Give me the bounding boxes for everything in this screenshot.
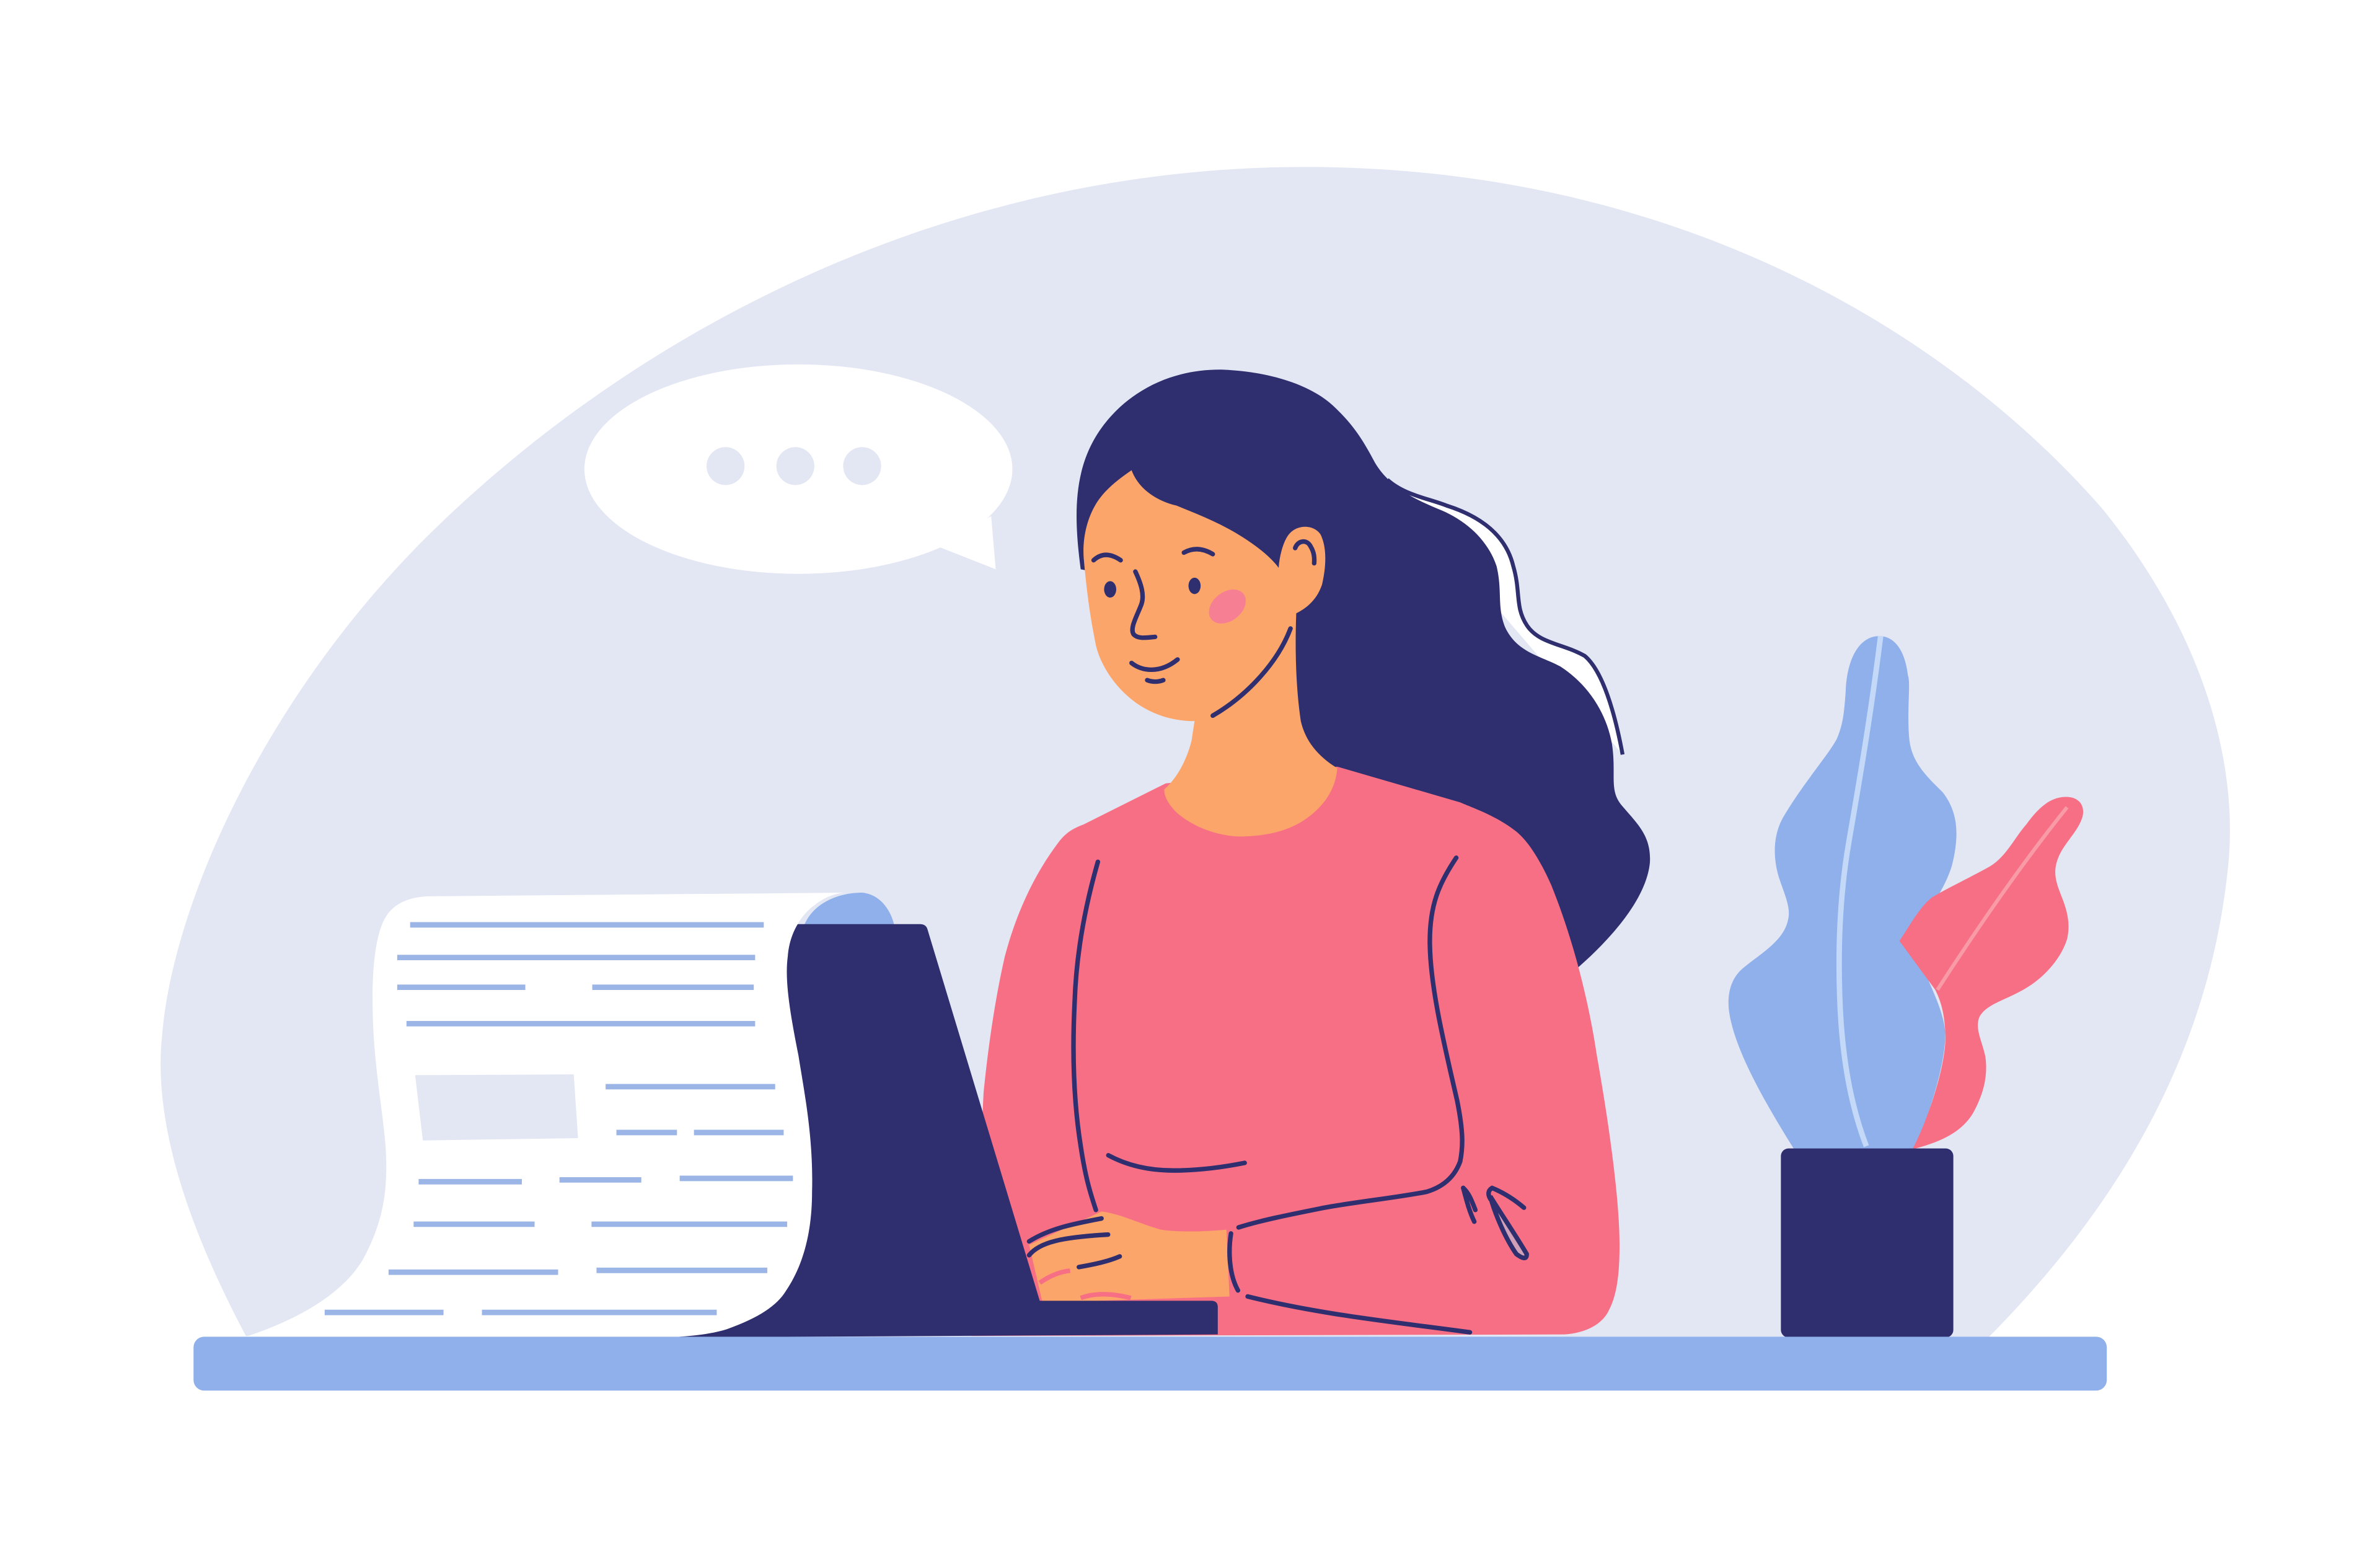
desk [193, 1336, 2107, 1390]
hair [1077, 369, 1650, 971]
woman [971, 369, 1650, 1336]
face details [1093, 542, 1315, 715]
background blob [161, 167, 2230, 1338]
speech bubble [584, 364, 1012, 574]
hand [1029, 1211, 1230, 1302]
paper document [246, 893, 844, 1338]
red leaf vein [1937, 807, 2067, 990]
hand pink accents [1040, 1271, 1130, 1298]
pot [1781, 1149, 1954, 1338]
laptop [669, 893, 1218, 1338]
text lines [325, 925, 793, 1312]
sweater [971, 767, 1620, 1336]
plant [1729, 636, 2083, 1338]
blue leaf [1729, 636, 1957, 1149]
laptop body [669, 924, 1218, 1338]
image placeholder [415, 1074, 578, 1141]
laptop screen back accent [804, 893, 894, 924]
skin: face and neck [1083, 470, 1338, 836]
red leaf [1900, 797, 2083, 1149]
sweater lines [1029, 858, 1527, 1332]
blue leaf vein [1839, 636, 1880, 1146]
